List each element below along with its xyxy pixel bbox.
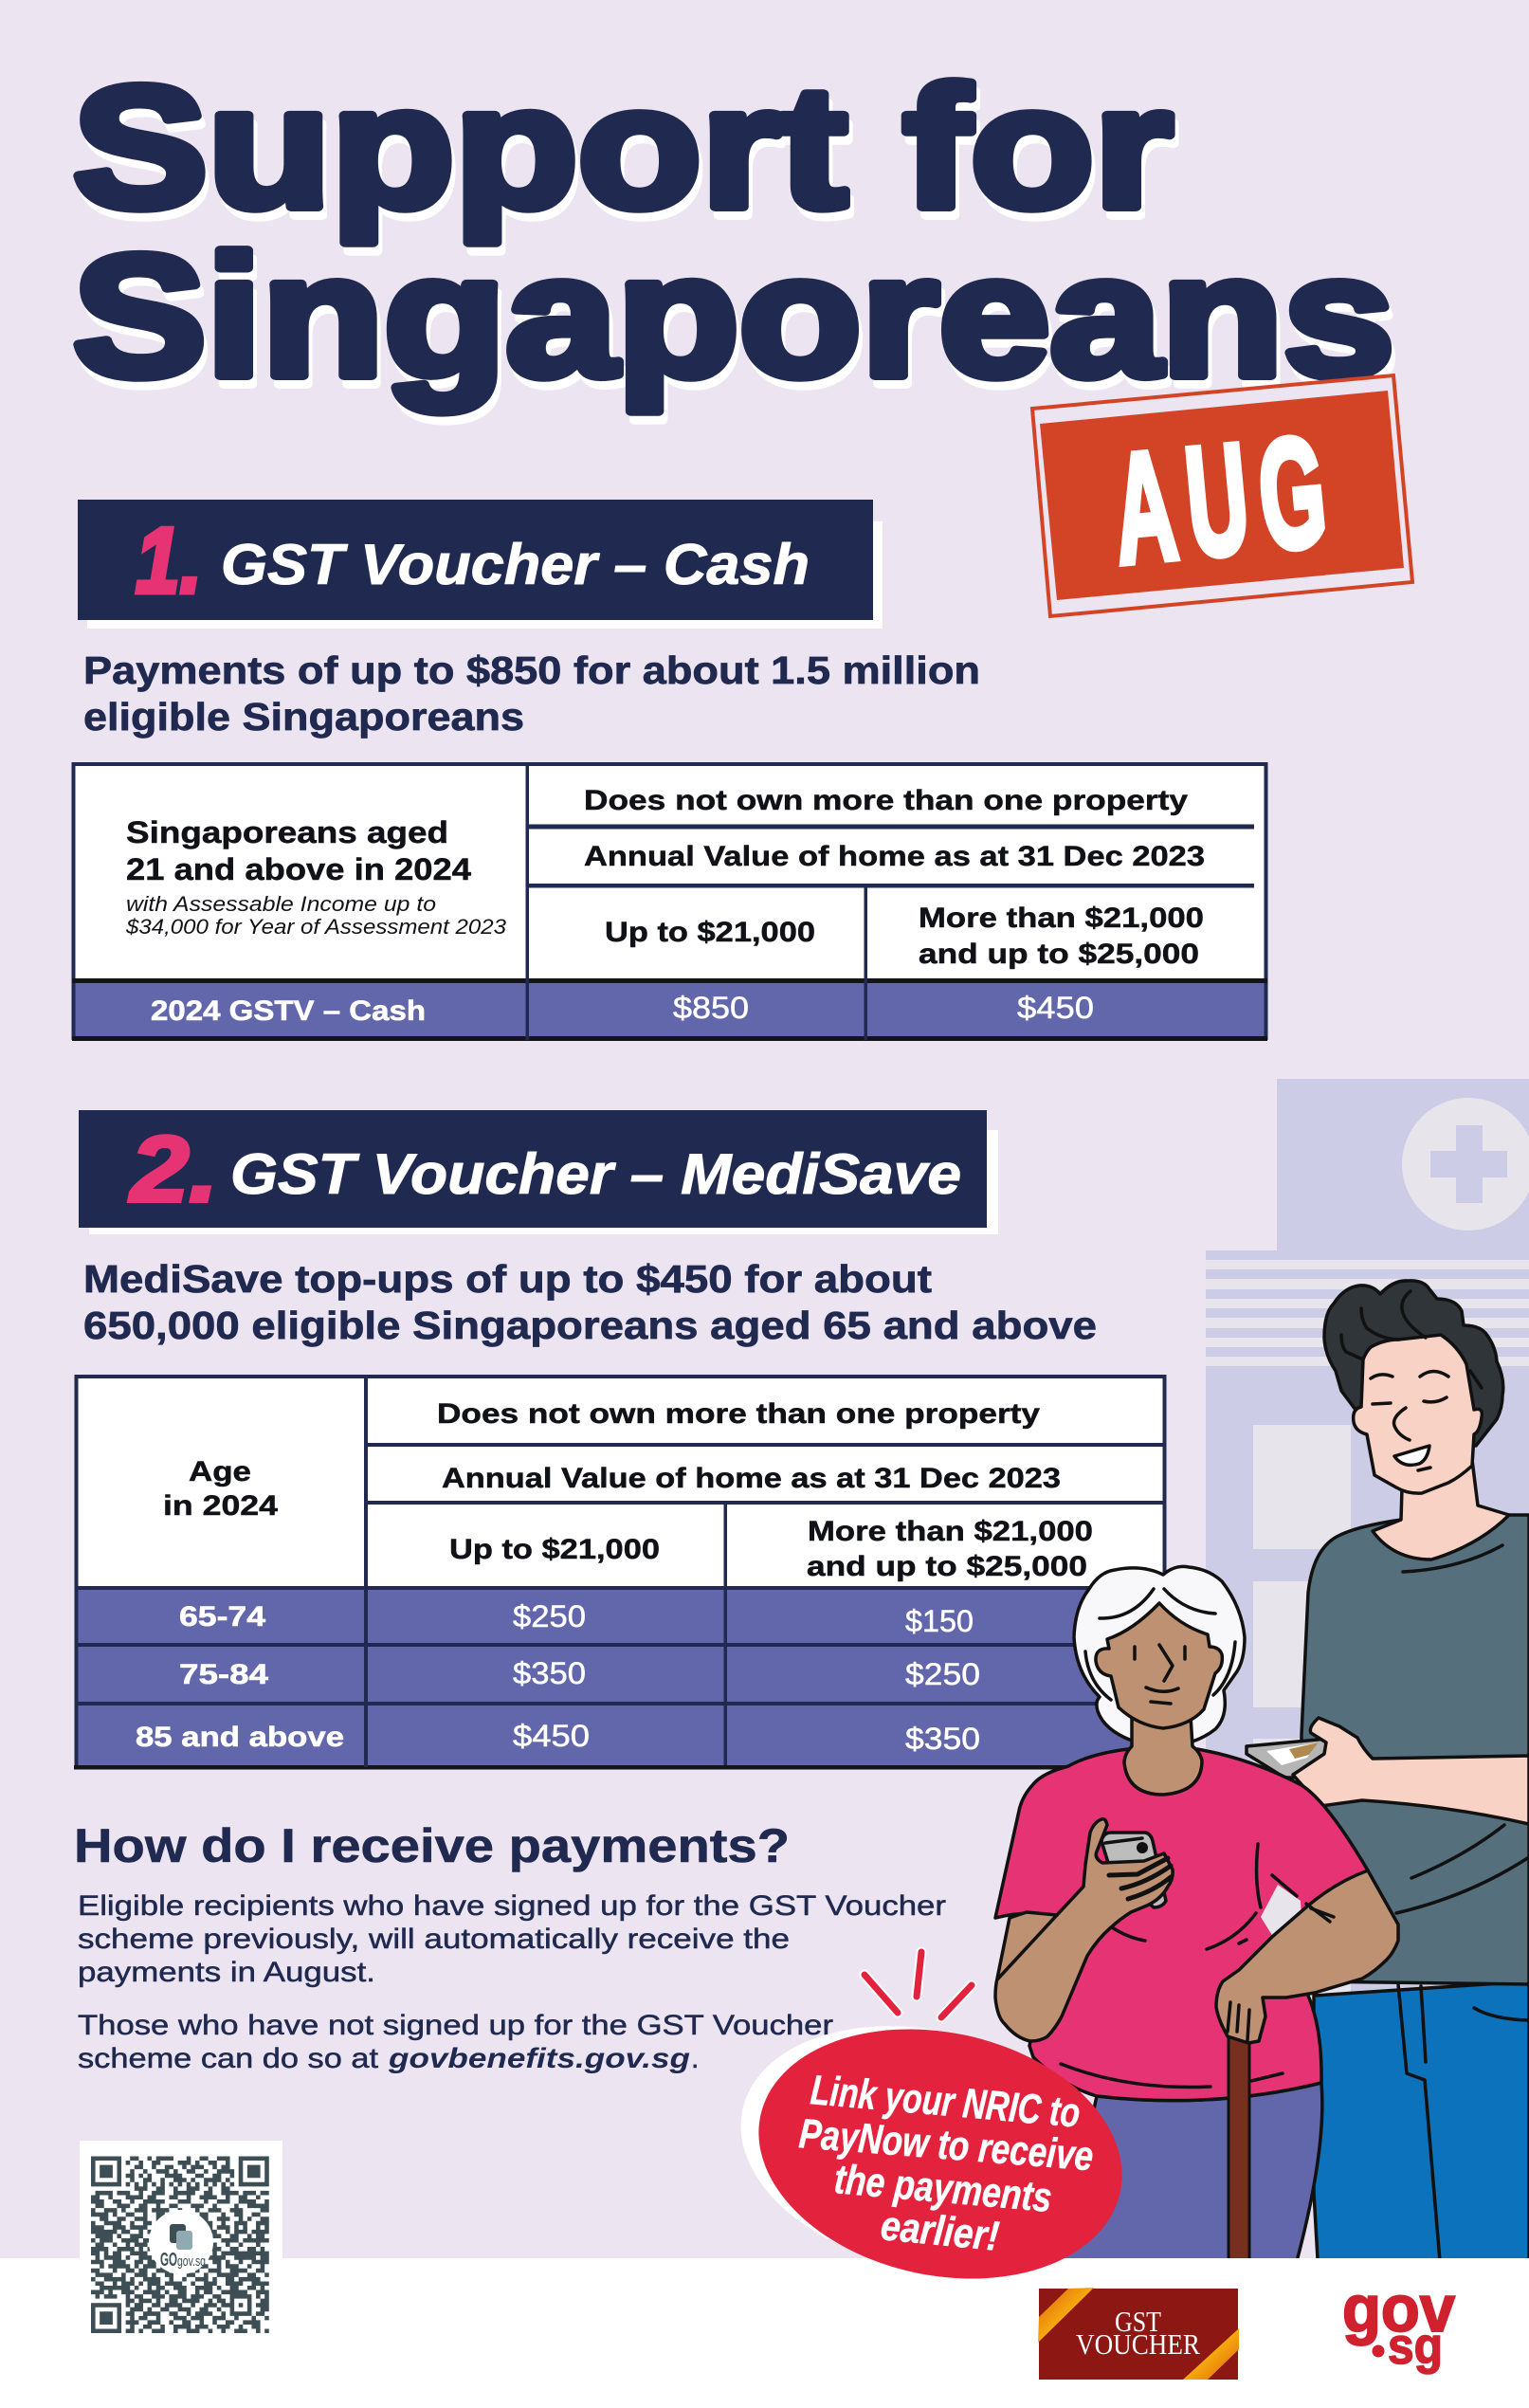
section 1 description (83, 648, 980, 739)
table: GST Voucher Cash amounts: $850 (673, 991, 749, 1025)
callout: text: PayNow to receive (797, 2110, 1095, 2180)
callout: link NRIC to PayNow (718, 1952, 1145, 2311)
woman: hand and elbow lines (1228, 1904, 1334, 2040)
man: t-shirt (1301, 1515, 1529, 1984)
woman: arm fold and finger lines (998, 1858, 1171, 1979)
table: GST Voucher Cash amounts: Up to $21,000 (605, 917, 815, 948)
illustration: man with phone (1247, 1281, 1529, 2275)
text block: how to receive payments: scheme previously, will automatically receive the (78, 1924, 790, 1955)
table: GST Voucher MediSave amounts (74, 1377, 1167, 1769)
table: GST Voucher Cash amounts: 21 and above in 2024 (126, 852, 471, 886)
table: GST Voucher Cash amounts: More than $21,000 (919, 903, 1204, 934)
table: GST Voucher MediSave amounts: Annual Value of home as at 31 Dec 2023 (442, 1463, 1061, 1494)
table: GST Voucher Cash amounts: Singaporeans aged (126, 815, 448, 849)
man: face (1354, 1335, 1482, 1493)
section 1 header bar: GST Voucher – Cash: 1. (136, 508, 202, 612)
woman: hair (1074, 1566, 1245, 1742)
text block: how to receive payments (78, 1890, 946, 2074)
table: GST Voucher MediSave amounts: $150 (905, 1604, 974, 1638)
woman: phone (1101, 1833, 1166, 1907)
table: GST Voucher MediSave amounts: 65-74 (179, 1601, 265, 1633)
QR code: gov.sg (177, 2253, 206, 2270)
section 1 description: eligible Singaporeans (83, 695, 524, 739)
section 2 description (83, 1257, 1097, 1347)
logo: GST Voucher (1038, 2288, 1239, 2380)
woman: facial features and hair strands (1085, 1589, 1235, 1704)
title: Support for Singaporeans: Singaporeans (77, 228, 1398, 421)
text block: how to receive payments: Those who have not signed up for the GST Voucher (78, 2010, 833, 2041)
man: forearm and hand (1293, 1718, 1529, 1824)
woman: pink shirt (995, 1749, 1368, 2101)
illustration: elderly woman with phone and cane (995, 1566, 1398, 2275)
table: GST Voucher MediSave amounts: Age (189, 1456, 251, 1487)
logo: gov.sg: gov (1342, 2271, 1455, 2345)
callout: text: earlier! (879, 2202, 1001, 2260)
section 1 header bar: GST Voucher – Cash (78, 500, 883, 629)
woman: cane (1229, 2029, 1249, 2275)
text block: how to receive payments: govbenefits.gov.sg (388, 2043, 690, 2074)
table: GST Voucher MediSave amounts: Does not own more than one property (437, 1398, 1040, 1430)
woman: right arm and hand on cane (1216, 1870, 1398, 2043)
table: GST Voucher Cash amounts: with Assessable Income up to (126, 892, 436, 916)
text block: how to receive payments: scheme can do so at (78, 2043, 379, 2074)
woman: trousers (1058, 2083, 1322, 2275)
section 2 header bar: GST Voucher – MediSave (79, 1110, 998, 1234)
footer band (0, 2258, 1529, 2408)
logo: gov.sg (1342, 2271, 1455, 2375)
table: GST Voucher Cash amounts: Does not own more than one property (584, 785, 1188, 816)
callout: text: the payments (832, 2156, 1054, 2221)
table: GST Voucher Cash amounts: Annual Value of home as at 31 Dec 2023 (584, 841, 1205, 872)
table: GST Voucher MediSave amounts: in 2024 (163, 1490, 278, 1522)
table: GST Voucher MediSave amounts: $450 (513, 1719, 590, 1753)
callout: text (797, 2067, 1095, 2260)
title: Support for Singaporeans: Singaporeans (73, 219, 1394, 412)
woman: face (1096, 1603, 1222, 1728)
section 1 description: Payments of up to $850 for about 1.5 million (83, 648, 980, 692)
table: GST Voucher MediSave amounts: $250 (513, 1599, 586, 1633)
table: GST Voucher MediSave amounts: More than $21,000 (808, 1516, 1093, 1547)
man: hair (1324, 1281, 1503, 1446)
callout: bubble (718, 1994, 1145, 2311)
QR code: GO (160, 2250, 177, 2271)
stamp: AUG (1032, 375, 1412, 616)
QR code (80, 2141, 282, 2344)
title: Support for Singaporeans (73, 50, 1398, 421)
table: GST Voucher Cash amounts (72, 764, 1267, 1041)
table: GST Voucher Cash amounts: $34,000 for Year of Assessment 2023 (125, 915, 507, 939)
table: GST Voucher MediSave amounts: 85 and above (136, 1722, 344, 1753)
title: Support for Singaporeans: Support for (77, 59, 1176, 252)
table: GST Voucher Cash amounts: $450 (1017, 991, 1094, 1025)
section 2 header bar: GST Voucher – MediSave: 2. (129, 1117, 218, 1221)
man: jeans (1314, 1981, 1529, 2275)
text block: how to receive payments: payments in August. (78, 1957, 375, 1988)
table: GST Voucher MediSave amounts: $350 (513, 1656, 586, 1690)
text block: how to receive payments: . (691, 2043, 699, 2074)
logo: GST Voucher: GST (1115, 2305, 1161, 2338)
heading: How do I receive payments?: How do I receive payments? (74, 1819, 790, 1872)
logo: GST Voucher: VOUCHER (1076, 2327, 1200, 2361)
woman: left arm and hand (995, 1819, 1173, 2041)
table: GST Voucher MediSave amounts: Up to $21,000 (449, 1534, 660, 1565)
man: phone (1247, 1739, 1328, 1778)
table: GST Voucher MediSave amounts: 75-84 (179, 1659, 268, 1690)
logo: gov.sg: sg (1388, 2318, 1443, 2375)
callout: text: Link your NRIC to (809, 2067, 1082, 2137)
title: Support for Singaporeans: Support for (73, 50, 1173, 244)
table: GST Voucher MediSave amounts: $350 (905, 1722, 980, 1756)
table: GST Voucher Cash amounts: and up to $25,000 (919, 939, 1199, 970)
table: GST Voucher Cash amounts: 2024 GSTV – Cash (151, 995, 426, 1027)
woman: neck (1124, 1716, 1202, 1795)
table: GST Voucher MediSave amounts: and up to $25,000 (807, 1551, 1087, 1582)
man: facial features (1341, 1291, 1482, 1470)
table: GST Voucher MediSave amounts: $250 (905, 1657, 980, 1691)
callout: burst rays (865, 1952, 972, 2017)
man: neck (1373, 1460, 1509, 1560)
stamp: AUG: AUG (1106, 403, 1345, 596)
background illustration: hospital building (1206, 1079, 1529, 2019)
text block: how to receive payments: Eligible recipients who have signed up for the GST Voucher (78, 1890, 946, 1922)
section 2 header bar: GST Voucher – MediSave: GST Voucher – MediSave (230, 1142, 961, 1206)
section 1 header bar: GST Voucher – Cash: GST Voucher – Cash (221, 533, 810, 596)
section 2 description: MediSave top-ups of up to $450 for about (83, 1257, 932, 1301)
section 2 description: 650,000 eligible Singaporeans aged 65 and above (83, 1304, 1097, 1347)
